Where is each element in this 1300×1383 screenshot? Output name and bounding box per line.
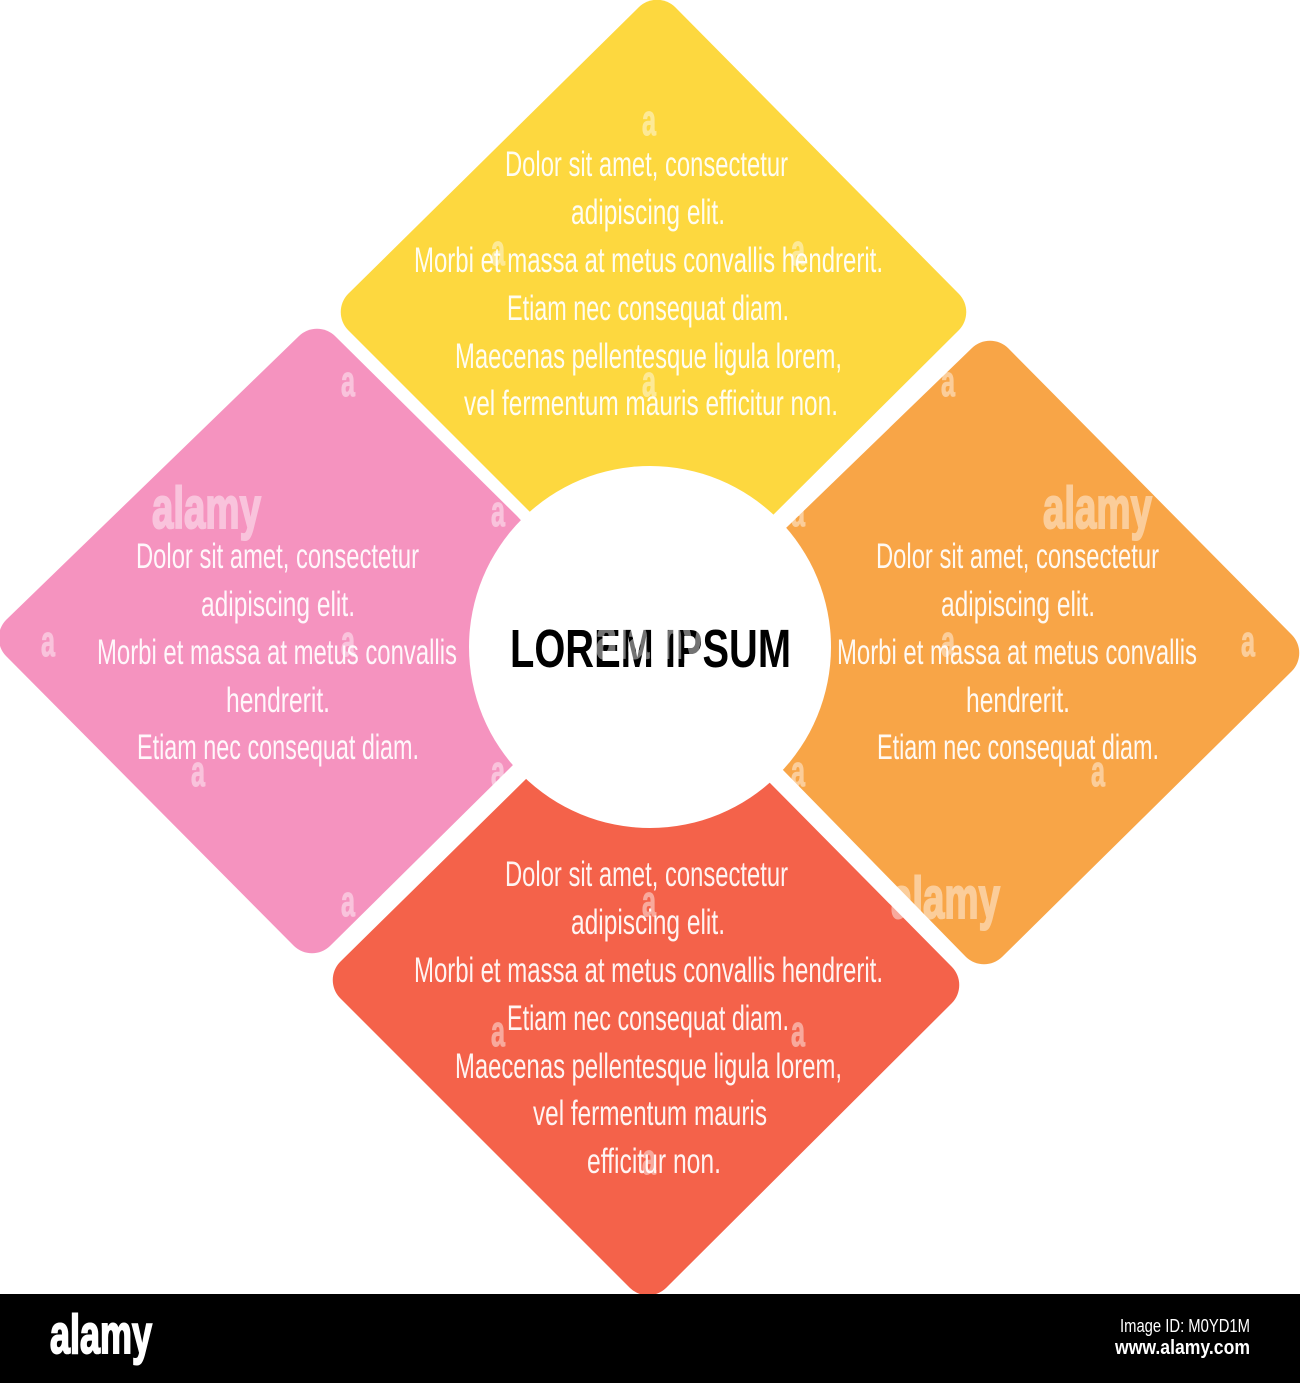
- central white circle: [469, 466, 831, 828]
- watermark: small a marks: a: [1241, 617, 1255, 666]
- footer image id: Image ID: M0YD1M: [1120, 1316, 1250, 1336]
- watermark: small a marks: a: [341, 877, 355, 926]
- panel: yellow top diamond: [341, 0, 966, 528]
- watermark: small a marks: a: [941, 617, 955, 666]
- watermark: small a marks: a: [41, 617, 55, 666]
- watermark: small a marks: a: [791, 747, 805, 796]
- text block: pink panel: hendrerit.: [226, 681, 330, 720]
- text block: yellow panel: vel fermentum mauris efficitur non.: [464, 384, 838, 423]
- watermark: small a marks: a: [1091, 747, 1105, 796]
- panel: red bottom diamond: [333, 765, 959, 1295]
- text block: yellow panel: Morbi et massa at metus convallis hendrerit.: [414, 241, 883, 280]
- watermark: small a marks: a: [642, 357, 656, 406]
- watermark: small a marks: a: [941, 357, 955, 406]
- text block: red panel: Etiam nec consequat diam.: [507, 999, 789, 1038]
- watermark: alamy words: [152, 476, 1152, 931]
- footer bar: [0, 1294, 1300, 1383]
- footer url: www.alamy.com: [1114, 1337, 1250, 1359]
- title: lorem ipsum: LOREM IPSUM: [510, 619, 791, 679]
- text block: orange panel: adipiscing elit.: [941, 585, 1095, 624]
- watermark: small a marks: a: [341, 357, 355, 406]
- text block: pink panel: adipiscing elit.: [201, 585, 355, 624]
- text block: orange panel: Etiam nec consequat diam.: [877, 728, 1159, 767]
- panel: orange right diamond: [770, 341, 1299, 964]
- text block: yellow panel: Dolor sit amet, consectetur: [505, 145, 788, 184]
- text block: pink panel: Etiam nec consequat diam.: [137, 728, 419, 767]
- text block: red panel: Dolor sit amet, consectetur: [505, 855, 788, 894]
- watermark: alamy words: alamy: [152, 476, 261, 541]
- watermark: small a marks: a: [191, 747, 205, 796]
- text block: pink panel: Morbi et massa at metus convallis: [97, 633, 457, 672]
- text block: orange panel: [837, 537, 1197, 767]
- watermark: alamy words: alamy: [596, 606, 704, 671]
- watermark: small a marks: a: [791, 1007, 805, 1056]
- text block: red panel: [414, 855, 883, 1181]
- text block: red panel: efficitur non.: [587, 1142, 721, 1181]
- text block: yellow panel: adipiscing elit.: [571, 193, 725, 232]
- text block: red panel: Morbi et massa at metus convallis hendrerit.: [414, 951, 883, 990]
- watermark: small a marks: a: [491, 487, 505, 536]
- watermark: small a marks: a: [491, 1007, 505, 1056]
- watermark: small a marks: a: [341, 617, 355, 666]
- watermark: small a marks: a: [491, 747, 505, 796]
- text block: red panel: Maecenas pellentesque ligula lorem,: [455, 1047, 842, 1086]
- watermark: alamy words: alamy: [891, 866, 1000, 931]
- text block: pink panel: [97, 537, 457, 767]
- watermark: small a marks: a: [642, 877, 656, 926]
- text block: yellow panel: Etiam nec consequat diam.: [507, 289, 789, 328]
- text block: yellow panel: Maecenas pellentesque ligula lorem,: [455, 337, 842, 376]
- text block: orange panel: hendrerit.: [966, 681, 1070, 720]
- text block: red panel: vel fermentum mauris: [533, 1094, 767, 1133]
- panel: pink left diamond: [0, 329, 530, 953]
- text block: red panel: adipiscing elit.: [571, 903, 725, 942]
- text block: yellow panel: [414, 145, 883, 423]
- watermark: small a marks: a: [642, 96, 656, 145]
- watermark: small a marks: a: [491, 226, 505, 275]
- text block: pink panel: Dolor sit amet, consectetur: [136, 537, 419, 576]
- watermark: small a marks: a: [642, 1135, 656, 1184]
- watermark: small a marks: a: [791, 487, 805, 536]
- footer logo: alamy: alamy: [50, 1303, 152, 1365]
- text block: orange panel: Dolor sit amet, consectetur: [876, 537, 1159, 576]
- watermark: small a marks: a: [791, 226, 805, 275]
- watermark: small a marks: [41, 96, 1255, 1184]
- watermark: alamy words: alamy: [1043, 476, 1152, 541]
